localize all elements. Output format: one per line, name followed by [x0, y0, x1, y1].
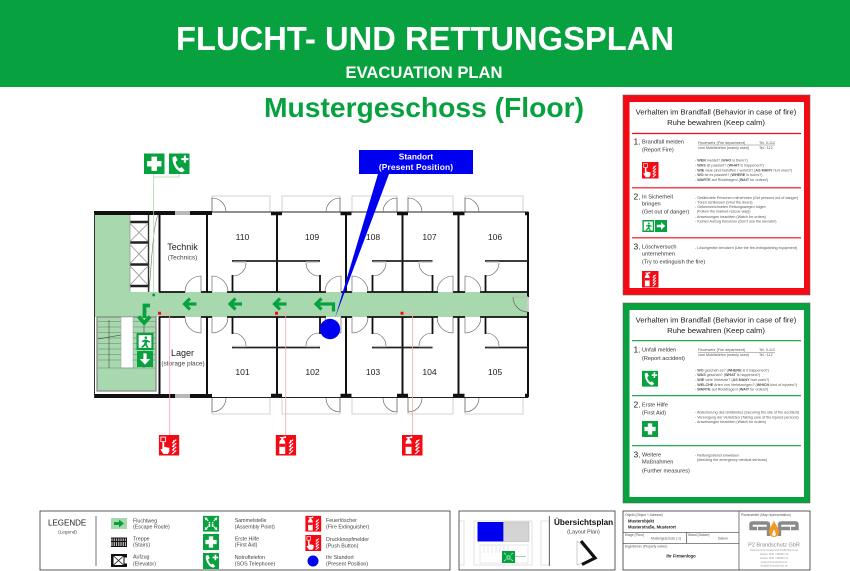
- section: report accident: Unfall melden: [642, 348, 676, 354]
- section: first aid: (First Aid): [642, 410, 666, 416]
- section: extinguish: Löschversuch: [642, 244, 677, 250]
- legend text column two: Erste Hilfe: [235, 536, 259, 542]
- title block: Stand (Datum): [688, 533, 709, 537]
- icon: fire extinguisher sign: [276, 435, 296, 456]
- mini floor plan: [460, 521, 549, 565]
- legend text column two: [235, 518, 275, 568]
- panel: accident behavior: Ruhe bewahren (Keep calm): [667, 326, 765, 335]
- section: further measures: - Rettungsdienst einweisen: [695, 453, 739, 457]
- doors: [185, 198, 528, 412]
- title block: Datum: [718, 536, 728, 540]
- layout plan: (Layout Plan): [567, 530, 600, 536]
- subtitle: EVACUATION PLAN: [346, 64, 502, 82]
- icon: first aid sign: [144, 154, 164, 174]
- legend text column one: Fluchtweg: [133, 518, 157, 524]
- legend icon: present position: [308, 556, 318, 566]
- room labels: 109: [305, 232, 319, 242]
- legend text column three: (Push Button): [326, 544, 359, 550]
- room labels: 108: [366, 232, 380, 242]
- header banner: [0, 0, 850, 87]
- legend: (Legend): [58, 530, 77, 535]
- legend text column one: Aufzug: [133, 554, 150, 560]
- company contact lines: [750, 549, 798, 568]
- section: get out of danger: (Get out of danger): [642, 210, 689, 216]
- section: extinguish: unternehmen: [642, 252, 675, 258]
- legend icon: stairs: [111, 537, 127, 547]
- legend text column two: (SOS Telephone): [235, 562, 275, 568]
- legend icon: telephone: [203, 553, 219, 569]
- exit sign: down arrow: [137, 351, 153, 367]
- floor plan: [94, 196, 529, 414]
- section: report accident: - WAS geschah? (WHAT is happened?): [695, 373, 760, 377]
- room labels: 101: [235, 367, 250, 377]
- section: report fire: Tel. 0-112: [759, 141, 775, 145]
- legend text column one: (Elevator): [133, 561, 156, 567]
- section: first aid: - Versorgung der Verletzten (Taking care of the injured persons): [695, 415, 799, 419]
- section: get out of danger: - Gekennzeichneten Rettungswegen folgen: [695, 205, 766, 209]
- legend text column two: Sammelstelle: [235, 518, 267, 524]
- legend text column three: [326, 518, 370, 568]
- legend text column one: (Escape Route): [133, 525, 170, 531]
- legend icon: push button: [305, 535, 321, 551]
- section: get out of danger: [634, 192, 798, 232]
- elevator shafts: [130, 215, 158, 292]
- layout plan: [459, 511, 615, 570]
- section: get out of danger: In Sicherheit: [642, 194, 674, 200]
- legend icon: assembly point: [203, 516, 219, 532]
- panel: fire behavior: Verhalten im Brandfall (Behavior in case of fire): [636, 108, 797, 116]
- exit sign: running person: [136, 333, 154, 350]
- stairwell: [97, 317, 156, 391]
- section: extinguish: [634, 242, 797, 288]
- section: get out of danger: - Keinen Aufzug benutzen (Don't use the elevator): [695, 220, 776, 224]
- north arrow: [577, 541, 596, 565]
- panel: fire behavior: Ruhe bewahren (Keep calm): [667, 118, 765, 127]
- room labels: 107: [422, 232, 437, 242]
- section: first aid: - Anweisungen beachten (Watch for orders): [695, 420, 766, 424]
- title block: [623, 511, 810, 570]
- company contact lines: www.p2-brandschutz.de: [761, 561, 788, 564]
- title block: Objekt (Object + Adresse): [625, 513, 663, 517]
- section: report fire: Brandfall melden: [642, 140, 684, 146]
- legend text column three: Druckknopfmelder: [326, 537, 369, 543]
- legend text column two: Notruftelefon: [235, 555, 265, 561]
- section: report fire: - WAS ist passiert? (WHAT is happened?): [695, 164, 764, 168]
- section: report fire: - WARTE auf Rückfragen! (WAIT for orders!): [695, 178, 768, 182]
- section: further measures: [634, 450, 767, 474]
- room labels: (Technics): [168, 254, 197, 262]
- section: report accident: - WARTE auf Rückfragen! (WAIT for orders!): [695, 388, 768, 392]
- icon: push button sign: [159, 435, 179, 456]
- section: further measures: Maßnahmen: [642, 460, 673, 466]
- legend icon: extinguisher: [305, 516, 321, 532]
- company contact lines: Telefon: 0511 / 969087-10: [760, 553, 789, 556]
- title block: Eigentümer (Property owner): [625, 544, 667, 548]
- section: report fire: 1.: [634, 136, 641, 146]
- title block: Mustergeschoss (-1): [651, 536, 681, 540]
- section: first aid: [634, 400, 799, 437]
- section: further measures: 3.: [634, 450, 641, 460]
- section: report accident: - WIE viele Verletzte? (AS MANY hurt ones?): [695, 378, 769, 382]
- leader lines: [152, 174, 412, 435]
- panel: accident behavior: [623, 303, 810, 503]
- section: first aid: 2.: [634, 400, 641, 410]
- room labels: 102: [305, 367, 320, 377]
- legend: [40, 511, 450, 570]
- icon: emergency telephone sign: [169, 154, 190, 174]
- floor heading: Mustergeschoss (Floor): [264, 92, 584, 123]
- present position callout: (Present Position): [379, 162, 453, 172]
- escape route area: [95, 215, 528, 317]
- escape arrows: [138, 298, 334, 323]
- section: report fire: Feuerwehr (Fire department): [698, 141, 745, 145]
- section: report accident: 1.: [634, 344, 641, 354]
- legend text column one: Treppe: [133, 536, 150, 542]
- section: report fire: (Report Fire): [642, 148, 674, 154]
- section: get out of danger: bringen: [642, 202, 661, 208]
- room labels: (storage place): [161, 360, 205, 368]
- legend icon: escape route: [111, 518, 127, 529]
- room labels: 106: [488, 232, 502, 242]
- section: report accident: (Report accident): [642, 356, 685, 362]
- legend text column one: (Stairs): [133, 543, 150, 549]
- title block: Ihr Firmenlogo: [666, 554, 696, 559]
- present position callout: [320, 150, 473, 339]
- title block: Musterobjekt: [628, 518, 655, 523]
- company contact lines: info@p2-brandschutz.de: [760, 564, 788, 568]
- section: get out of danger: - Türen schliessen (Shut the doors): [695, 200, 753, 204]
- section: report accident: Tel. 0-112: [759, 348, 775, 352]
- room labels: 110: [236, 232, 250, 242]
- legend icon: elevator: [111, 554, 128, 567]
- legend icon: first aid: [203, 534, 219, 550]
- legend text column three: (Present Position): [326, 562, 368, 568]
- section: report accident: - WO geschah es? (WHERE is it happened?): [695, 369, 769, 373]
- section: first aid: Erste Hilfe: [642, 403, 668, 409]
- section: report accident: - WELCHE Arten von Verletzungen? (WHICH kind of injuries?): [695, 383, 797, 387]
- section: get out of danger: - Gefährdete Personen mitnehmen (Get persons out of danger): [695, 196, 798, 200]
- section: further measures: Weitere: [642, 453, 661, 459]
- section: first aid: - Absicherung des Unfallortes (Securing the site of the accident): [695, 410, 799, 414]
- icon: fire extinguisher sign: [402, 435, 422, 456]
- room labels: 105: [488, 367, 502, 377]
- room labels: Lager: [171, 348, 194, 358]
- legend text column three: Feuerlöscher: [326, 518, 357, 524]
- section: report fire: - WIE viele sind betroffen / verletzt? (AS MANY hurt ones?): [695, 168, 792, 172]
- section: report accident: vom Mobiltelefon (mainly used): [698, 353, 749, 357]
- section: get out of danger: (Follow the marked rescue way)): [697, 210, 750, 214]
- legend: LEGENDE: [48, 519, 86, 528]
- section: report accident: Feuerwehr (Fire department): [698, 348, 745, 352]
- room labels: Technik: [167, 242, 198, 252]
- legend text column one: [133, 518, 170, 567]
- section: further measures: (directing the emergency medical services): [697, 458, 767, 462]
- section: report fire: vom Mobiltelefon (mainly used): [698, 146, 749, 150]
- present position callout: Standort: [399, 152, 433, 162]
- walls: [94, 212, 529, 398]
- section: further measures: (Further measures): [642, 468, 690, 474]
- section: report fire: Tel.: 112: [759, 146, 773, 150]
- title block: P2 Brandschutz GbR: [748, 542, 800, 548]
- room labels: [161, 232, 502, 377]
- section: extinguish: 3.: [634, 242, 641, 252]
- layout plan: Übersichtsplan: [554, 517, 613, 527]
- company contact lines: Telefax: 0511 / 969087-11: [760, 557, 789, 560]
- title block: Etage (Floor): [625, 533, 644, 537]
- panel: fire behavior: [623, 95, 810, 295]
- legend text column two: (Assembly Point): [235, 525, 275, 531]
- legend text column three: Ihr Standort: [326, 555, 354, 561]
- panel: accident behavior: Verhalten im Brandfall (Behavior in case of fire): [636, 316, 797, 325]
- legend text column three: (Fire Extinguisher): [326, 525, 370, 531]
- title block: Planersteller (Map representation): [741, 513, 791, 517]
- section: extinguish: (Try to extinguish the fire): [642, 260, 705, 266]
- room labels: 104: [422, 367, 437, 377]
- section: report accident: Tel.: 112: [759, 353, 773, 357]
- section: get out of danger: 2.: [634, 192, 641, 202]
- section: report accident: [634, 344, 797, 392]
- section: report fire: - WO ist es passiert? (WHERE is burns?): [695, 173, 762, 177]
- room labels: 103: [366, 367, 380, 377]
- section: report fire: [634, 136, 792, 182]
- title block: Musterstraße, Musterort: [628, 524, 677, 529]
- company contact lines: Hannoversche Straße 123 30159 Hannover: [750, 549, 798, 552]
- legend text column two: (First Aid): [235, 543, 258, 549]
- section: report fire: - WER meldet? (WHO is there?): [695, 159, 748, 163]
- grey windows: [212, 196, 523, 414]
- company logo: [751, 520, 797, 537]
- section: extinguish: - Löschgeräte benutzen (Use the fire-extinguishing equipment): [695, 246, 797, 250]
- title: FLUCHT- UND RETTUNGSPLAN: [176, 20, 674, 57]
- section: get out of danger: - Anweisungen beachten (Watch for orders): [695, 215, 766, 219]
